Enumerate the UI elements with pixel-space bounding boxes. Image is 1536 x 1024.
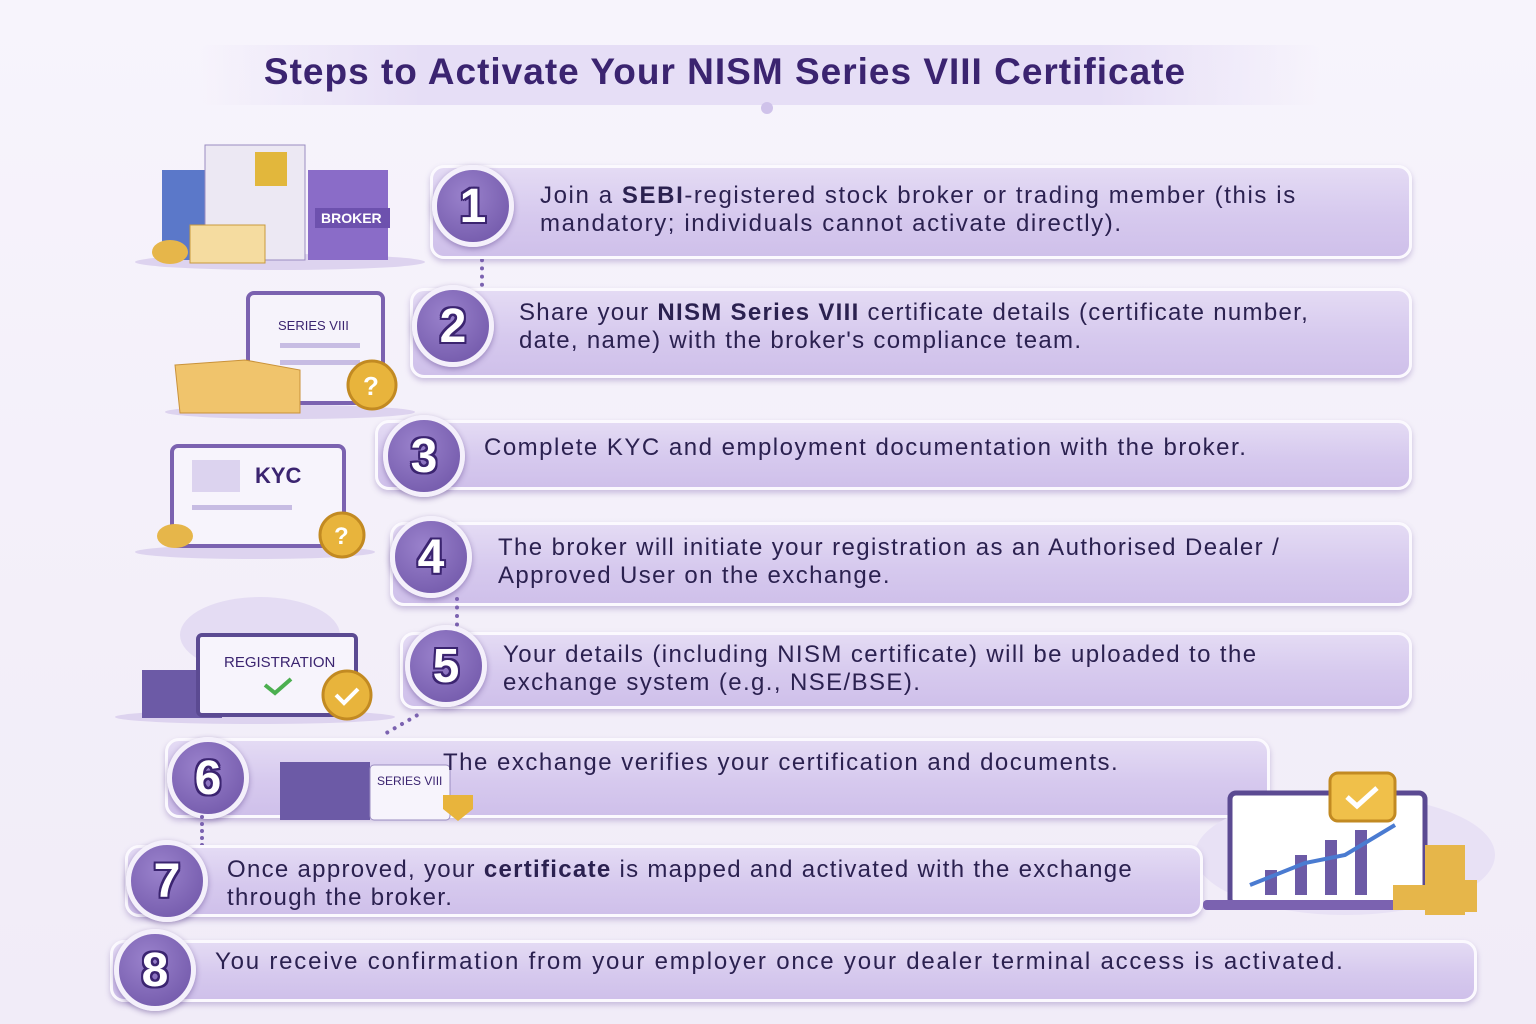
text: 4 [418, 530, 444, 584]
dotted connector 5-6 [385, 713, 419, 735]
text: through the broker. [227, 884, 453, 911]
step 1 [430, 165, 1412, 259]
icon: KYC [135, 444, 375, 559]
text: Once approved, your certificate is mapped and activated with the exchange [227, 856, 1133, 883]
icon: server with certificate [280, 762, 473, 821]
text: 1 [460, 180, 486, 232]
text: 3 [411, 430, 437, 482]
title: Steps to Activate Your NISM Series VIII Certificate [264, 51, 1186, 92]
icon: registration: REGISTRATION [224, 654, 335, 671]
step 7 [125, 845, 1203, 917]
step 5 [400, 632, 1412, 709]
text: date, name) with the broker's compliance team. [519, 327, 1082, 354]
step 3 [375, 420, 1412, 490]
step 8 [110, 940, 1477, 1002]
text: The exchange verifies your certification and documents. [443, 749, 1119, 776]
text: 7 [154, 854, 180, 908]
icon: broker building [135, 144, 425, 270]
step 2 [410, 288, 1412, 378]
text: The broker will initiate your registration as an Authorised Dealer / [498, 534, 1280, 561]
icon: series viii clipboard: SERIES VIII [278, 318, 349, 333]
title band [200, 45, 1320, 105]
title dot [761, 102, 773, 114]
icon: KYC: KYC [255, 463, 302, 488]
text: Join a SEBI-registered stock broker or trading member (this is [540, 182, 1297, 209]
text: exchange system (e.g., NSE/BSE). [503, 669, 921, 696]
text: Your details (including NISM certificate) will be uploaded to the [503, 641, 1257, 668]
icon: series viii clipboard [165, 291, 415, 419]
text: Approved User on the exchange. [498, 562, 891, 589]
text: 5 [433, 640, 459, 692]
dotted connector 6-7 [200, 815, 204, 847]
icon: server with certificate: SERIES VIII [377, 774, 442, 788]
text: Share your NISM Series VIII certificate details (certificate number, [519, 299, 1309, 326]
text: 8 [142, 944, 168, 996]
dotted connector 1-2 [480, 250, 484, 295]
icon: broker building: BROKER [321, 210, 382, 226]
text: mandatory; individuals cannot activate directly). [540, 210, 1123, 237]
icon: series viii clipboard: ? [363, 371, 379, 401]
text: 6 [195, 752, 221, 804]
icon: registration [115, 597, 395, 724]
text: 2 [440, 300, 466, 352]
icon: KYC: ? [334, 523, 349, 550]
icon: laptop chart with coins [1196, 772, 1495, 915]
dotted connector 4-5 [455, 597, 459, 635]
step 4 [390, 522, 1412, 606]
step 6 [165, 738, 1270, 818]
text: You receive confirmation from your employer once your dealer terminal access is activated. [215, 948, 1345, 975]
text: Complete KYC and employment documentation with the broker. [484, 434, 1247, 461]
